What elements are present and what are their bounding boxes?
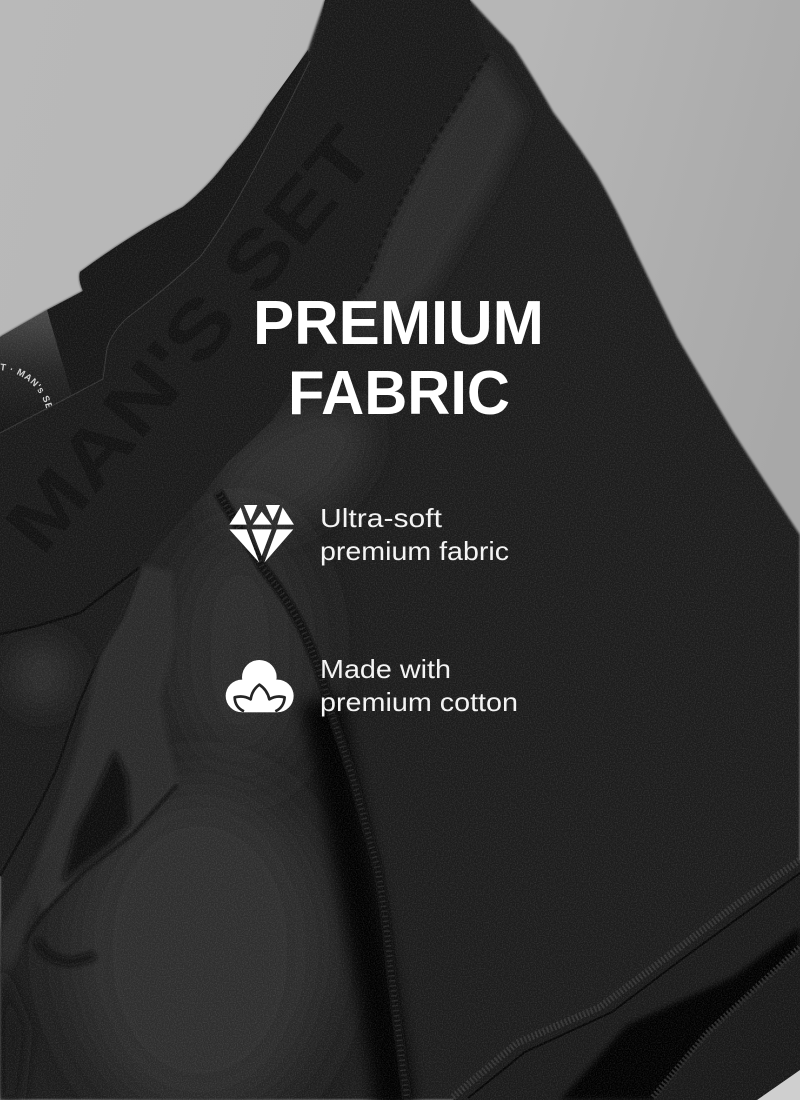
bottom hem with stitching bbox=[453, 860, 800, 1100]
back waistband layer bbox=[47, 50, 310, 396]
title: FABRIC bbox=[288, 359, 510, 428]
feature: made with premium cotton bbox=[226, 654, 518, 717]
title bbox=[253, 289, 544, 428]
icon: diamond bbox=[229, 505, 294, 563]
pocket fold ruffle bbox=[0, 565, 178, 1100]
feature: ultra-soft premium fabric bbox=[229, 503, 509, 566]
corner of grey surface, lower right bbox=[757, 1070, 800, 1100]
text: ultra-soft premium fabric: Ultra-soft bbox=[320, 503, 443, 533]
front waistband bbox=[0, 0, 487, 634]
text: made with premium cotton: Made with bbox=[320, 654, 451, 684]
text: made with premium cotton bbox=[320, 654, 518, 717]
icon: cotton boll bbox=[226, 660, 294, 712]
gathered frill along the waistband bbox=[353, 54, 525, 345]
text: ultra-soft premium fabric bbox=[320, 503, 509, 566]
title: PREMIUM bbox=[253, 289, 544, 358]
body fabric shading bbox=[70, 377, 395, 1100]
side seam stitching bbox=[218, 492, 407, 1100]
inner label bbox=[0, 310, 64, 432]
text: made with premium cotton: premium cotton bbox=[320, 687, 518, 717]
text: ultra-soft premium fabric: premium fabric bbox=[320, 536, 509, 566]
dark side panel with gathers bbox=[0, 567, 140, 876]
